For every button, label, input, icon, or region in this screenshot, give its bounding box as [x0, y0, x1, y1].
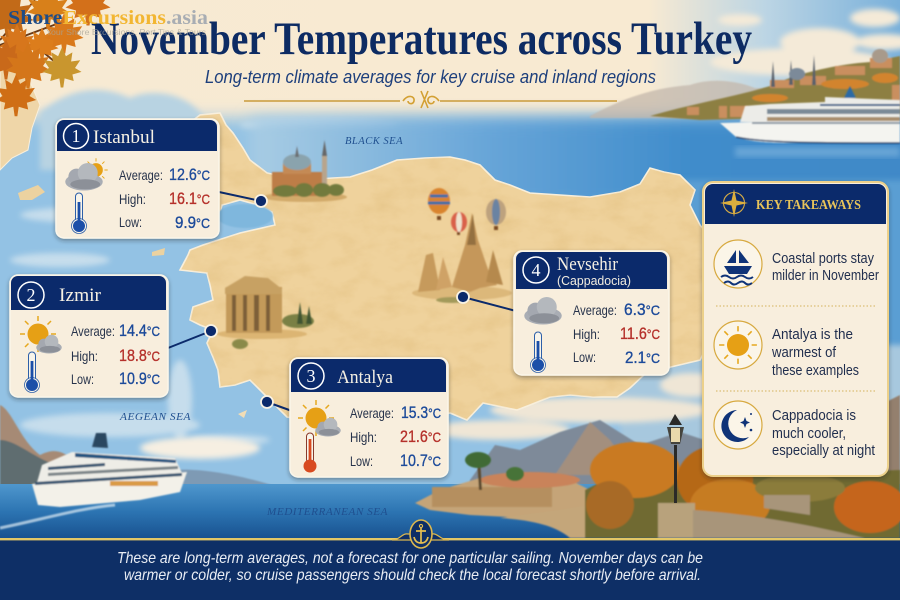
panel: key takeaways — [703, 182, 888, 476]
card: Nevsehir — [514, 251, 669, 375]
card: Antalya: 21.6°C — [400, 427, 441, 446]
icon: cruise ship, top right — [720, 86, 900, 143]
card: Izmir: Izmir — [59, 285, 102, 306]
sea: right side behind takeaways — [670, 180, 900, 355]
panel: key takeaways: much cooler, — [772, 426, 846, 442]
card: Antalya — [290, 358, 448, 477]
card: Istanbul — [56, 119, 219, 238]
card: Izmir: 14.4°C — [119, 321, 160, 340]
footer banner — [0, 538, 900, 600]
card: Izmir: Average: — [71, 323, 115, 339]
scene: sky and mountains, bottom left — [0, 405, 275, 486]
card: Antalya: 10.7°C — [400, 451, 441, 470]
subtitle: Long-term climate averages for key cruise and inland regions — [205, 66, 656, 87]
card: Antalya: Antalya — [337, 367, 394, 388]
card: Izmir: Low: — [71, 371, 94, 387]
panel: key takeaways: Antalya is the — [772, 327, 853, 343]
panel: key takeaways: KEY TAKEAWAYS — [756, 197, 861, 212]
card: Antalya: 15.3°C — [401, 403, 441, 422]
card: Nevsehir: 2.1°C — [625, 348, 660, 367]
watermark: ShoreExcursions.asia: Your Shore Excursions, Port Tips & Tours — [46, 28, 206, 37]
icon: moon and stars — [714, 401, 762, 449]
card: Istanbul: Low: — [119, 214, 142, 230]
icon: street lamp — [667, 414, 684, 503]
scene: sky and mountains, bottom right — [430, 345, 900, 500]
watermark: ShoreExcursions.asia: ShoreExcursions .asia — [8, 7, 208, 29]
panel: key takeaways: Coastal ports stay — [772, 251, 875, 267]
ornament: gold divider — [244, 91, 617, 108]
connector: Istanbul — [219, 192, 267, 207]
panel: key takeaways: these examples — [772, 363, 859, 379]
leaves: autumn maple branch — [0, 0, 110, 116]
card: Nevsehir: 4 — [532, 260, 540, 280]
card: Istanbul: 9.9°C — [175, 213, 210, 232]
landmark: Hagia Sophia — [263, 140, 347, 202]
panel: key takeaways: milder in November — [772, 268, 879, 284]
scene: harbour town and autumn terrace — [415, 442, 900, 538]
clouds: top right sky — [710, 9, 900, 76]
card: Izmir: 18.8°C — [119, 346, 160, 365]
panel: key takeaways: especially at night — [772, 443, 875, 459]
title: November Temperatures across Turkey — [91, 13, 752, 65]
connector: Izmir — [168, 325, 217, 348]
landmark: Ephesus library — [217, 276, 314, 349]
card: Nevsehir: Low: — [573, 349, 596, 365]
sea: lower band — [0, 484, 900, 540]
card: Nevsehir: (Cappadocia) — [557, 274, 631, 288]
card: Antalya: High: — [350, 429, 377, 445]
label: Aegean Sea: AEGEAN SEA — [119, 411, 191, 423]
card: Nevsehir: 11.6°C — [620, 324, 660, 343]
card: Izmir: High: — [71, 348, 98, 364]
card: Nevsehir: 6.3°C — [624, 300, 660, 319]
footer banner: warmer or colder, so cruise passengers should check the local forecast shortly before arrival. — [124, 567, 701, 584]
icon: anchor medallion — [392, 520, 449, 548]
card: Istanbul: High: — [119, 191, 146, 207]
label: Black Sea: BLACK SEA — [345, 135, 403, 147]
card: Istanbul: 16.1°C — [169, 189, 210, 208]
card: Izmir: 2 — [26, 285, 36, 305]
icon: cruise ship, bottom left — [0, 433, 187, 528]
panel: key takeaways: Cappadocia is — [772, 408, 856, 424]
card: Istanbul: 1 — [72, 126, 80, 146]
card: Istanbul: Average: — [119, 167, 163, 183]
background: pale sea across the map — [0, 90, 900, 498]
sea reflection of ship — [735, 147, 900, 157]
card: Nevsehir: Average: — [573, 302, 617, 318]
sea: upper right bay — [250, 118, 900, 208]
card: Izmir — [10, 275, 168, 397]
scene: Istanbul coast with skyline — [590, 49, 900, 120]
icon: boat — [714, 240, 762, 288]
connector: Nevsehir — [457, 291, 516, 311]
card: Izmir: 10.9°C — [119, 369, 160, 388]
card: Antalya: Low: — [350, 453, 373, 469]
footer banner: These are long-term averages, not a forecast for one particular sailing. November days can be — [117, 550, 703, 567]
landmark: Cappadocia rock chimneys — [412, 213, 512, 303]
icon: compass — [720, 189, 748, 217]
label: Mediterranean Sea: MEDITERRANEAN SEA — [266, 506, 388, 518]
card: Istanbul: 12.6°C — [169, 165, 210, 184]
land: map of Turkey and Greek coast — [0, 55, 712, 425]
icon: sun — [714, 321, 762, 369]
card: Nevsehir: High: — [573, 326, 600, 342]
panel: key takeaways: warmest of — [771, 345, 837, 361]
icon: hot air balloons — [428, 188, 506, 235]
card: Antalya: 3 — [306, 366, 316, 386]
card: Nevsehir: Nevsehir — [557, 254, 619, 275]
card: Istanbul: Istanbul — [93, 127, 155, 148]
sea of Marmara — [217, 204, 273, 228]
connector: Antalya — [261, 396, 292, 411]
card: Antalya: Average: — [350, 405, 394, 421]
